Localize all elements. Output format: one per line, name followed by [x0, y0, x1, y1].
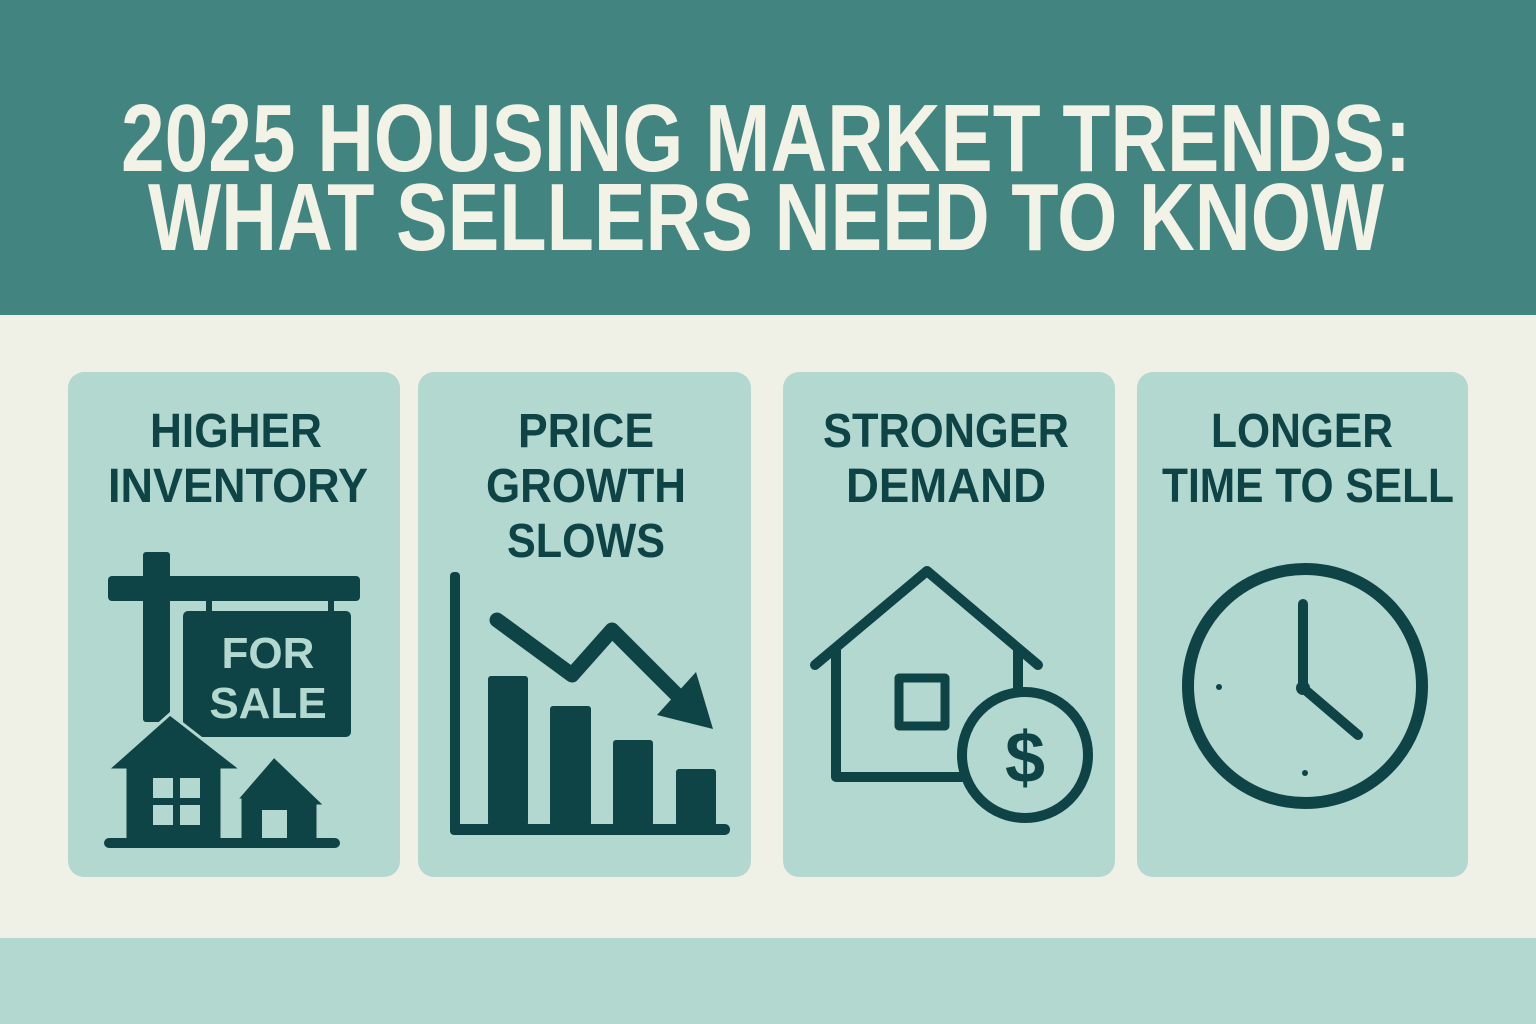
panel: stronger demand [783, 372, 1115, 877]
panel: price growth slows [418, 372, 751, 877]
bottom band [0, 938, 1536, 1024]
icon: for sale sign with houses: SALE [209, 679, 327, 728]
icon: for sale sign with houses [104, 552, 360, 848]
heading: stronger demand [823, 405, 1069, 513]
heading: price growth slows: PRICE [518, 405, 654, 458]
panel: longer time to sell [1137, 372, 1468, 877]
heading: higher inventory: HIGHER [150, 405, 322, 458]
header banner [0, 0, 1536, 315]
heading: longer time to sell [1162, 405, 1454, 513]
heading: longer time to sell: LONGER [1211, 405, 1393, 458]
chart: declining bars with arrow [450, 572, 730, 835]
heading: price growth slows: SLOWS [507, 515, 665, 568]
title [121, 85, 1411, 271]
heading: higher inventory [108, 405, 368, 513]
icon: clock [1188, 569, 1422, 803]
icon: house with dollar coin: $ [1005, 718, 1045, 798]
icon: house with dollar coin [815, 571, 1088, 818]
heading: higher inventory: INVENTORY [108, 460, 368, 513]
icon: for sale sign with houses: FOR [222, 629, 314, 678]
heading: stronger demand: STRONGER [823, 405, 1069, 458]
heading: stronger demand: DEMAND [846, 460, 1046, 513]
panel: higher inventory [68, 372, 400, 877]
heading: price growth slows: GROWTH [486, 460, 686, 513]
heading: longer time to sell: TIME TO SELL [1162, 460, 1454, 513]
heading: price growth slows [486, 405, 686, 568]
